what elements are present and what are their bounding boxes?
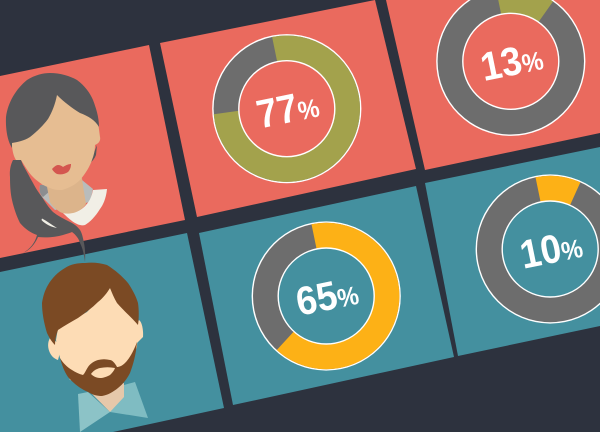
donut chart: 10%	[476, 174, 600, 324]
panel: man portrait	[0, 233, 224, 432]
mouth	[91, 367, 115, 378]
hair behind neck	[90, 145, 97, 163]
donut chart: 13%	[436, 0, 585, 136]
panel: 13 percent	[386, 0, 600, 170]
face	[12, 92, 100, 190]
value label: 10%	[516, 222, 586, 278]
icon: man	[42, 263, 148, 432]
value label: 77%	[253, 81, 323, 138]
collar	[62, 189, 107, 225]
value label: 65%	[292, 269, 362, 325]
ears	[48, 338, 62, 360]
face	[56, 288, 138, 385]
panel: 10 percent	[425, 147, 600, 356]
value label: 13%	[477, 34, 547, 90]
shirt collar left	[78, 392, 110, 432]
icon: woman	[6, 73, 107, 262]
ponytail highlight	[42, 218, 57, 228]
donut chart: 77%	[212, 34, 361, 183]
panel: 77 percent	[160, 0, 416, 217]
neck	[88, 383, 124, 412]
panel: 65 percent	[199, 186, 454, 405]
collar shadow	[40, 180, 93, 210]
panel: woman portrait	[0, 45, 185, 262]
lips	[52, 164, 71, 174]
donut chart: 65%	[252, 221, 401, 371]
neck	[47, 178, 86, 214]
ponytail	[10, 160, 85, 262]
hair cap	[6, 73, 99, 148]
hair	[42, 263, 139, 345]
beard	[60, 342, 137, 396]
shirt collar right	[110, 382, 148, 418]
